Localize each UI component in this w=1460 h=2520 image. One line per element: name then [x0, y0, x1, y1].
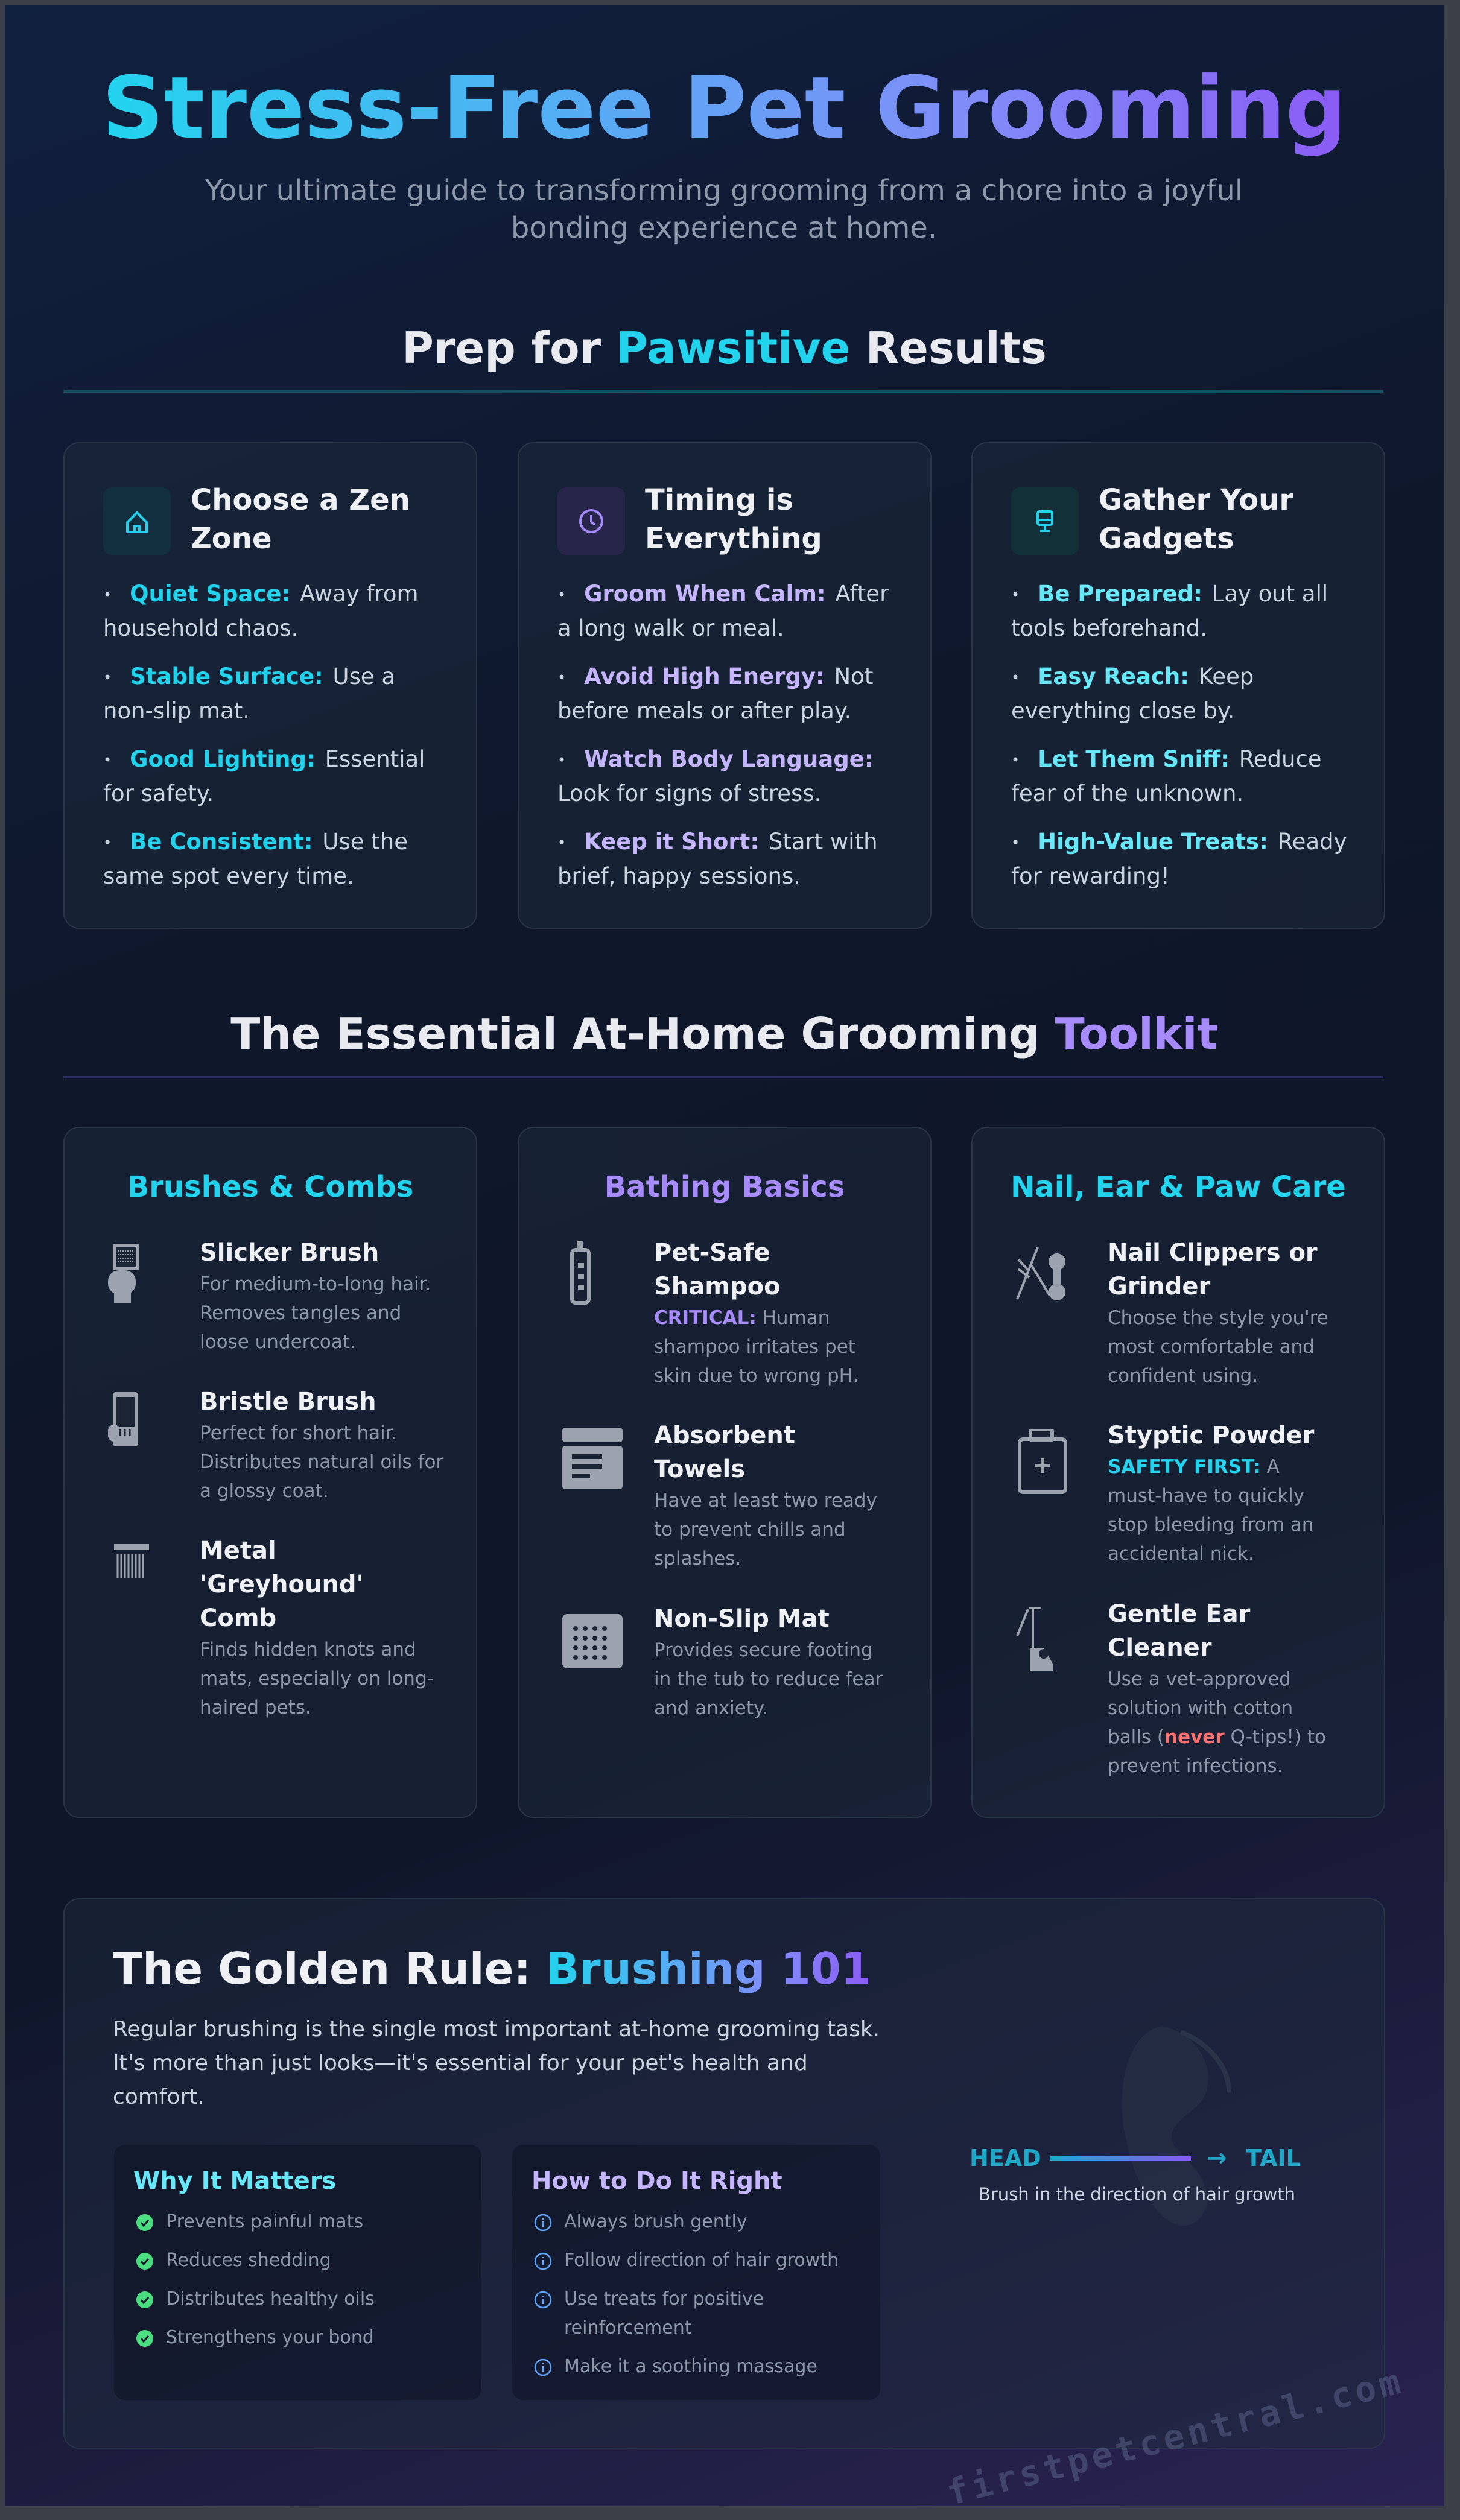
box: why it matters: Why It Matters [133, 2167, 336, 2195]
panel: nail ear paw [971, 1127, 1385, 1818]
panel: zen zone [63, 442, 477, 929]
box: why it matters: Distributes healthy oils [166, 2288, 375, 2309]
bullet list: • Quiet Space: Away from household chaos. [103, 581, 419, 641]
diagram: head to tail: Brush in the direction of hair growth [979, 2184, 1295, 2205]
panel: gadgets [971, 442, 1385, 929]
item: shampoo: CRITICAL: Human shampoo irritates pet skin due to wrong pH. [654, 1307, 859, 1387]
icon: towel [562, 1428, 623, 1489]
icon: shampoo [570, 1241, 591, 1305]
card title: Gadgets [1099, 522, 1234, 556]
card title: Choose a Zen [191, 483, 410, 517]
item: shampoo [654, 1239, 859, 1387]
bullet list [1011, 581, 1347, 889]
item: mat: Provides secure footing in the tub to reduce fear and anxiety. [654, 1639, 883, 1719]
item: slicker: For medium-to-long hair. Removes tangles and loose undercoat. [200, 1273, 431, 1353]
card title: Gather Your [1099, 483, 1293, 517]
box: how to do it right: Follow direction of hair growth [564, 2250, 839, 2271]
panel: timing [518, 442, 932, 929]
heading: toolkit: The Essential At-Home Grooming Toolkit [230, 1008, 1218, 1059]
item: shampoo: Shampoo [654, 1273, 781, 1300]
item: clippers: Grinder [1108, 1273, 1210, 1300]
box: why it matters [114, 2145, 481, 2400]
bullet list [103, 581, 425, 889]
panel: golden rule [63, 1898, 1385, 2449]
diagram: head to tail: HEAD [970, 2145, 1041, 2171]
icon: powder [1018, 1429, 1067, 1494]
icon: comb [114, 1544, 149, 1578]
item: towels: Have at least two ready to prevent chills and splashes. [654, 1490, 877, 1569]
item: ear cleaner [1108, 1597, 1335, 1781]
panel: bathing [518, 1127, 932, 1818]
bullet list: • Good Lighting: Essential for safety. [103, 746, 425, 806]
box: how to do it right: How to Do It Right [532, 2167, 782, 2195]
icon: house [103, 487, 171, 555]
card title: Zone [191, 522, 272, 556]
item: clippers: Nail Clippers or [1108, 1239, 1318, 1267]
icon: monitor [1011, 487, 1079, 555]
item: comb: Metal [200, 1537, 276, 1565]
column title: Brushes & Combs [127, 1170, 413, 1204]
item: clippers: Choose the style you're most comfortable and confident using. [1108, 1307, 1328, 1387]
item: slicker: Slicker Brush [200, 1239, 379, 1267]
title: Stress-Free Pet Grooming [102, 59, 1347, 158]
item: bristle: Perfect for short hair. Distributes natural oils for a glossy coat. [200, 1422, 443, 1502]
item: comb [200, 1537, 434, 1718]
card title: Timing is [645, 483, 793, 517]
bullet list: • Easy Reach: Keep everything close by. [1011, 663, 1254, 724]
item: slicker [200, 1239, 431, 1353]
icon: clock [557, 487, 625, 555]
column title: Nail, Ear & Paw Care [1011, 1170, 1346, 1204]
box: how to do it right: Use treats for positive reinforcement [564, 2288, 764, 2338]
heading: prep: Prep for Pawsitive Results [402, 323, 1047, 373]
card title [191, 483, 410, 556]
item: bristle: Bristle Brush [200, 1388, 376, 1416]
item: mat [654, 1605, 883, 1719]
icon: mat [562, 1614, 623, 1668]
item: comb: Finds hidden knots and mats, especially on long-haired pets. [200, 1639, 434, 1718]
subtitle: Your ultimate guide to transforming grooming from a chore into a joyful bonding experience at home. [205, 174, 1243, 245]
box: how to do it right: Always brush gently [564, 2211, 747, 2232]
column title: Bathing Basics [605, 1170, 845, 1204]
bullet list: • Keep it Short: Start with brief, happy sessions. [557, 829, 878, 889]
item: shampoo: Pet-Safe [654, 1239, 770, 1267]
item: bristle [200, 1388, 444, 1502]
item: powder: SAFETY FIRST: A must-have to quickly stop bleeding from an accidental nick. [1108, 1456, 1313, 1565]
icon: clippers [1016, 1247, 1065, 1300]
box: how to do it right [512, 2145, 880, 2400]
diagram: head to tail: TAIL [1246, 2145, 1301, 2171]
item: ear cleaner: Gentle Ear [1108, 1600, 1250, 1628]
bullet list: • Stable Surface: Use a non-slip mat. [103, 663, 395, 724]
bullet list: • Let Them Sniff: Reduce fear of the unknown. [1011, 746, 1322, 806]
item: clippers [1108, 1239, 1328, 1387]
bullet list: • Be Prepared: Lay out all tools beforehand. [1011, 581, 1328, 641]
item: towels: Absorbent [654, 1422, 795, 1449]
icon: slicker brush [108, 1244, 139, 1303]
bullet list: • Be Consistent: Use the same spot every time. [103, 829, 408, 889]
diagram: head to tail [970, 2144, 1331, 2210]
panel: brushes [63, 1127, 477, 1818]
box: how to do it right: Make it a soothing massage [564, 2356, 817, 2377]
card title: Everything [645, 522, 822, 556]
icon: ear cleaner [1016, 1607, 1053, 1671]
diagram: head to tail: → [1207, 2144, 1227, 2172]
intro text: Regular brushing is the single most important at-home grooming task. It's more than just looks—it's essential for your pet's health and comfort. [113, 2017, 880, 2109]
box: why it matters: Reduces shedding [166, 2250, 331, 2271]
icon: bristle brush [108, 1392, 138, 1446]
box: why it matters: Prevents painful mats [166, 2211, 363, 2232]
bullet list: • Groom When Calm: After a long walk or meal. [557, 581, 889, 641]
item: mat: Non-Slip Mat [654, 1605, 830, 1633]
title: The Golden Rule: Brushing 101 [113, 1943, 871, 1994]
card title [1099, 483, 1293, 556]
item: towels: Towels [654, 1455, 745, 1483]
item: towels [654, 1422, 877, 1569]
item: comb: 'Greyhound' [200, 1571, 364, 1598]
item: ear cleaner: Use a vet-approved solution with cotton balls (never Q-tips!) to prevent infections. [1108, 1668, 1326, 1777]
bullet list [557, 581, 889, 889]
pet silhouette [1090, 2020, 1247, 2249]
box: why it matters: Strengthens your bond [166, 2327, 374, 2348]
bullet list: • Avoid High Energy: Not before meals or after play. [557, 663, 873, 724]
item: ear cleaner: Cleaner [1108, 1634, 1212, 1662]
item: powder: Styptic Powder [1108, 1422, 1314, 1449]
item: comb: Comb [200, 1604, 276, 1632]
bullet list: • High-Value Treats: Ready for rewarding! [1011, 829, 1347, 889]
bullet list: • Watch Body Language: Look for signs of stress. [557, 746, 874, 806]
card title [645, 483, 822, 556]
